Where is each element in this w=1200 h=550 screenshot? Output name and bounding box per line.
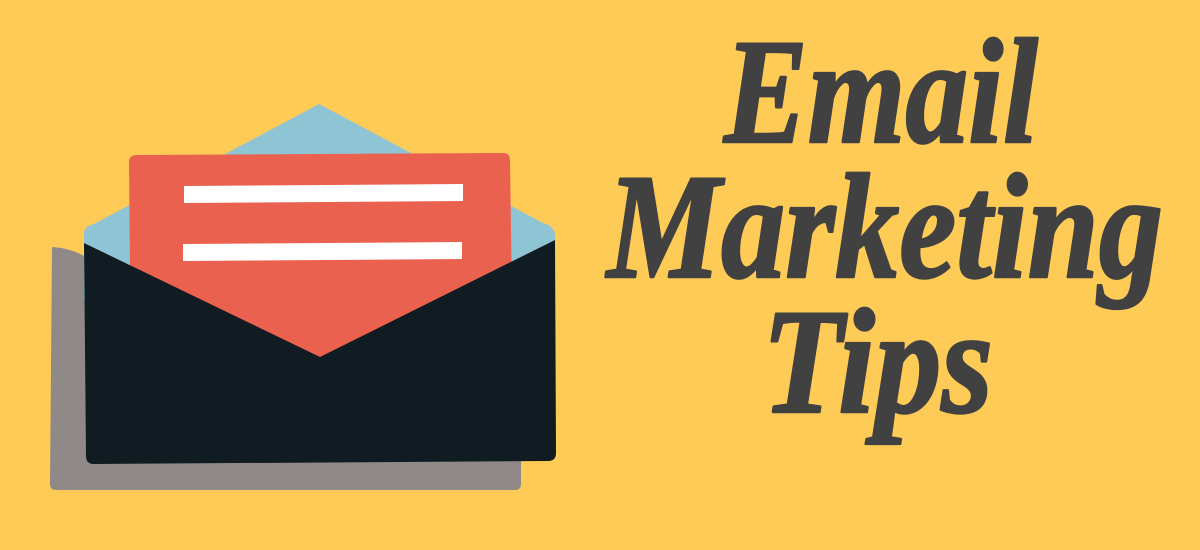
- icon: open envelope with letter: [50, 104, 556, 490]
- envelope flap: [84, 104, 555, 300]
- envelope body: [84, 240, 556, 464]
- title line: Tips: Tips: [762, 279, 993, 445]
- envelope shadow: [50, 247, 521, 490]
- letter line: top: [184, 184, 463, 203]
- title: [605, 9, 1163, 445]
- red letter: [129, 153, 513, 370]
- letter line: bottom: [183, 242, 462, 261]
- title line: Email: Email: [722, 9, 1038, 175]
